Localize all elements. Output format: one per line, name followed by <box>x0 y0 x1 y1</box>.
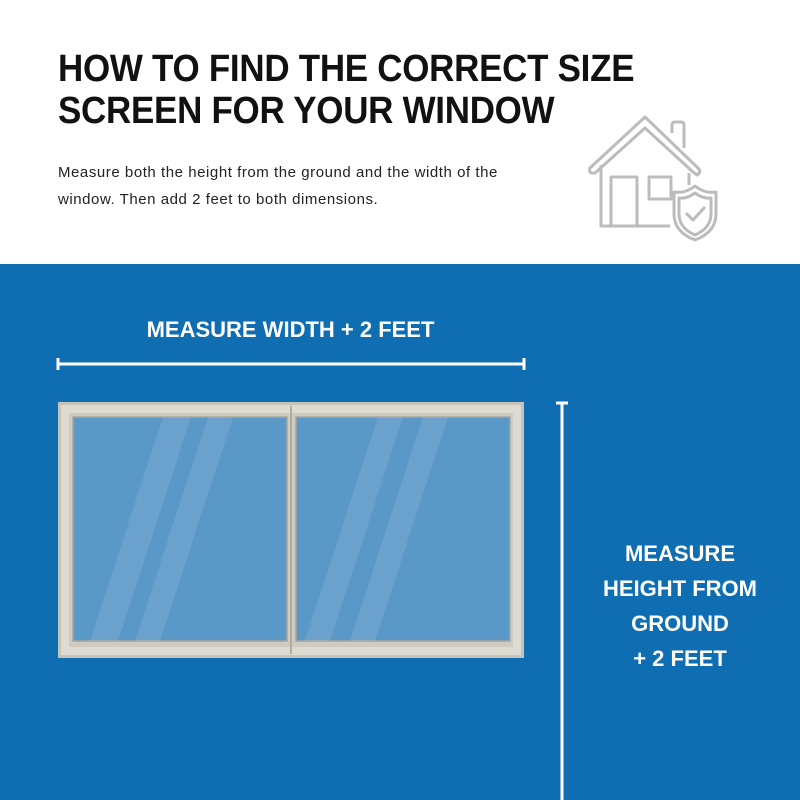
height label: + 2 FEET <box>633 646 727 671</box>
width label: MEASURE WIDTH + 2 FEET <box>147 317 434 342</box>
arrow: width measure line <box>56 358 526 370</box>
height label: GROUND <box>631 611 729 636</box>
description: Measure both the height from the ground and the width of the window. Then add 2 feet to both dimensions. <box>58 164 498 208</box>
arrow: height measure line <box>556 402 568 800</box>
height label: MEASURE <box>625 541 735 566</box>
icon: house with shield <box>588 115 718 242</box>
title: HOW TO FIND THE CORRECT SIZE <box>58 48 634 90</box>
window illustration <box>58 402 524 658</box>
title <box>58 48 634 132</box>
title: SCREEN FOR YOUR WINDOW <box>58 90 554 132</box>
height label <box>603 541 757 671</box>
height label: HEIGHT FROM <box>603 576 757 601</box>
panel: blue measurement area <box>0 264 800 800</box>
